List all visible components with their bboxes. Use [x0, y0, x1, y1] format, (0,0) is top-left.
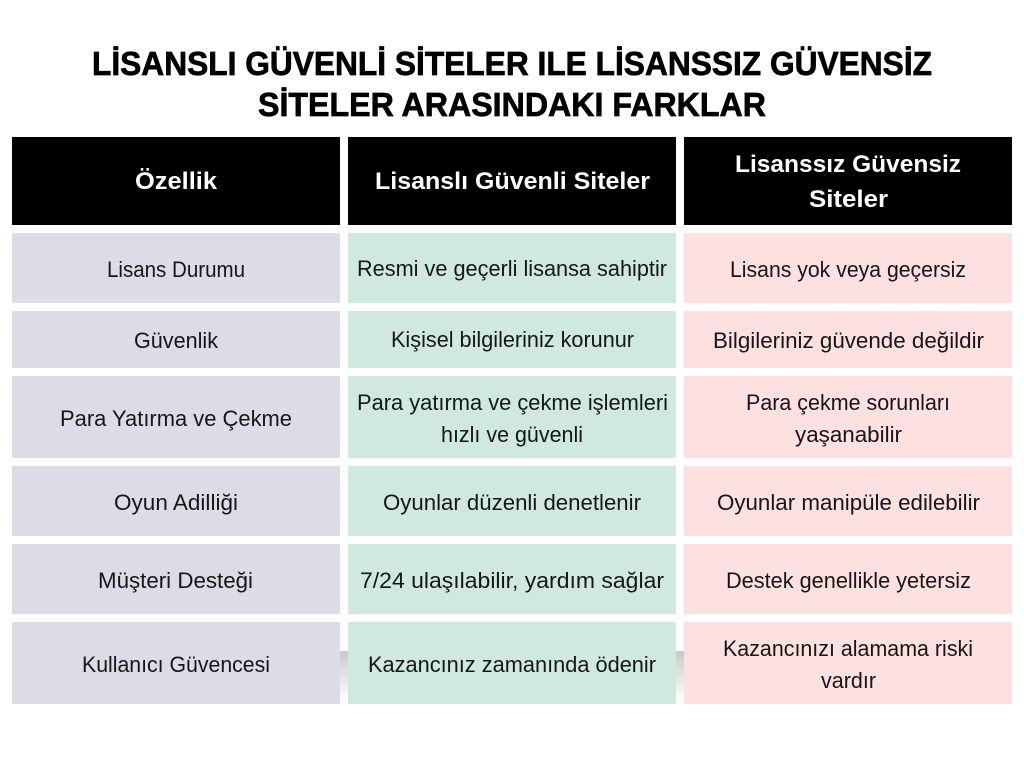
row: Oyun Adilliği: Oyunlar düzenli denetlenir	[383, 490, 641, 515]
row: Kullanıcı Güvencesi: Kullanıcı Güvencesi	[82, 652, 270, 677]
shadow behind last row	[340, 651, 684, 701]
header: Özellik	[12, 137, 340, 225]
row: Oyun Adilliği: Oyunlar manipüle edilebilir	[717, 490, 980, 515]
row: Lisans Durumu: Lisans Durumu	[107, 257, 245, 282]
row: Müşteri Desteği: 7/24 ulaşılabilir, yardım sağlar	[360, 568, 664, 593]
row: Güvenlik	[12, 311, 1012, 368]
row: Oyun Adilliği: Oyun Adilliği	[114, 490, 238, 515]
row: Para Yatırma ve Çekme: Para Yatırma ve Çekme	[60, 406, 292, 431]
row: Oyun Adilliği	[12, 466, 1012, 536]
header: Özellik: Özellik	[135, 168, 218, 195]
row: Para Yatırma ve Çekme	[12, 376, 1012, 458]
header: Lisanssız Güvensiz Siteler: Lisanssız Güvensiz	[735, 151, 961, 178]
row: Kullanıcı Güvencesi: vardır	[821, 668, 876, 693]
row: Güvenlik: Bilgileriniz güvende değildir	[713, 328, 984, 353]
header: Lisanssız Güvensiz Siteler: Siteler	[809, 186, 888, 213]
row: Para Yatırma ve Çekme: hızlı ve güvenli	[441, 422, 583, 447]
row: Kullanıcı Güvencesi: Kazancınızı alamama riski	[723, 636, 973, 661]
header: Lisanslı Güvenli Siteler: Lisanslı Güvenli Siteler	[375, 168, 650, 195]
row: Para Yatırma ve Çekme: Para çekme sorunları	[746, 390, 950, 415]
row: Lisans Durumu: Lisans yok veya geçersiz	[730, 257, 966, 282]
row: Para Yatırma ve Çekme: Para yatırma ve çekme işlemleri	[357, 390, 668, 415]
row: Müşteri Desteği: Destek genellikle yetersiz	[726, 568, 971, 593]
row: Kullanıcı Güvencesi	[12, 622, 1012, 704]
title	[92, 45, 932, 123]
row: Lisans Durumu: Resmi ve geçerli lisansa sahiptir	[357, 256, 667, 281]
row: Müşteri Desteği: Müşteri Desteği	[98, 568, 253, 593]
row: Kullanıcı Güvencesi: Kazancınız zamanında ödenir	[368, 652, 656, 677]
row: Lisans Durumu	[12, 233, 1012, 303]
row: Para Yatırma ve Çekme: yaşanabilir	[795, 422, 902, 447]
header: Lisanslı Güvenli Siteler	[348, 137, 676, 225]
header: Lisanssız Güvensiz Siteler	[684, 137, 1012, 225]
row: Müşteri Desteği	[12, 544, 1012, 614]
row: Güvenlik: Güvenlik	[134, 328, 219, 353]
title: SİTELER ARASINDAKI FARKLAR	[258, 86, 766, 123]
row: Güvenlik: Kişisel bilgileriniz korunur	[391, 327, 634, 352]
title: LİSANSLI GÜVENLİ SİTELER ILE LİSANSSIZ GÜVENSİZ	[92, 45, 932, 82]
